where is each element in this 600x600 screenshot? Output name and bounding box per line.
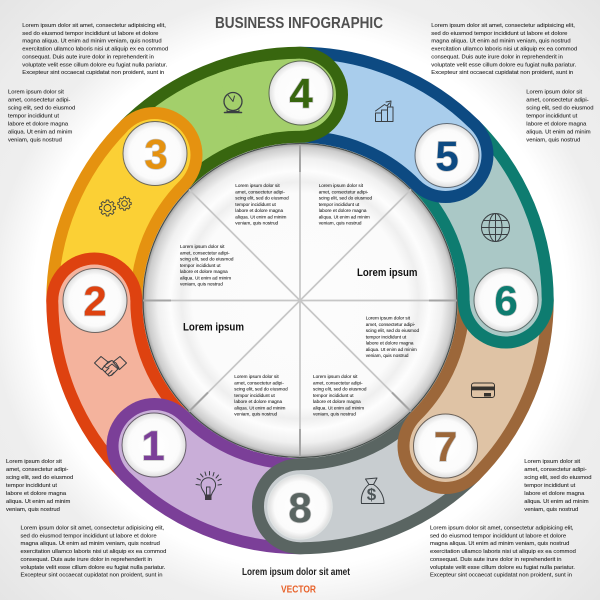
text block: upper left side [8,89,75,143]
text block: upper left side: aliqua. Ut enim ad minim [8,129,72,135]
text block: upper right side [526,89,594,143]
text block: upper right side: scing elit, sed do eiusmod [526,105,594,111]
disc text: bottom right: tempor incididunt ut [313,393,354,398]
icon: bar chart with arrow [376,101,393,122]
disc text: bottom left: amet, consectetur adipi- [234,380,284,385]
central disc [143,144,457,458]
badge 6 [474,268,538,332]
disc text: top left of top: amet, consectetur adipi- [235,189,285,194]
disc text: upper left: labore et dolore magna [180,269,228,274]
disc text: top left of top: scing elit, sed do eiusmod [235,196,289,200]
text block: bottom left: consequat. Duis aute irure dolor in reprehenderit in [20,557,152,563]
disc text: top left of top [235,183,289,226]
disc text: lower right: tempor incididunt ut [366,334,407,339]
text block: top right: Excepteur sint occaecat cupidatat non proident, sunt in [431,70,573,76]
text block: bottom left: magna aliqua. Ut enim ad minim veniam, quis nostrud [20,541,160,547]
disc text: lower right: veniam, quis nostrud [366,353,409,358]
disc heading right: Lorem ipsum [357,267,418,279]
disc text: lower right: amet, consectetur adipi- [366,322,416,327]
text block: lower right side: labore et dolore magna [524,491,585,497]
text block: upper left side: amet, consectetur adipi- [8,97,70,103]
text block: upper left side: scing elit, sed do eiusmod [8,105,75,111]
text block: bottom right: magna aliqua. Ut enim ad minim veniam, quis nostrud [430,541,569,547]
text block: bottom right: consequat. Duis aute irure dolor in reprehenderit in [430,557,562,563]
disc text: lower right: labore et dolore magna [366,340,414,346]
segment 4 body: green [154,95,300,155]
badge 5: 5 [435,132,459,180]
text block: lower right side: amet, consectetur adipi- [524,467,587,473]
disc text: upper left: tempor incididunt ut [180,263,221,268]
disc text: top right: tempor incididunt ut [319,202,360,207]
badge 3: 3 [144,130,168,178]
disc text: bottom left: tempor incididunt ut [234,393,276,398]
disc text: bottom right: veniam, quis nostrud [313,412,356,416]
text block: top right: voluptate velit esse cillum dolore eu fugiat nulla pariatur. [431,62,577,68]
text block: lower right side: Lorem ipsum dolor sit [524,459,581,465]
text block: top left: Excepteur sint occaecat cupidatat non proident, sunt in [22,70,164,76]
disc text: bottom right: Lorem ipsum dolor sit [313,374,358,379]
text block: lower left side: scing elit, sed do eiusmod [6,475,73,481]
disc text: top right: labore et dolore magna [319,208,367,213]
badge 4: 4 [289,70,313,117]
text block: upper left side: labore et dolore magna [8,121,69,127]
disc text: bottom left: aliqua. Ut enim ad minim [234,405,286,410]
disc text: upper left: veniam, quis nostrud [180,282,223,286]
text block: top left: Lorem ipsum dolor sit amet, consectetur adipisicing elit, [22,23,166,29]
disc text: top left of top: veniam, quis nostrud [235,220,279,226]
text block: bottom right: sed do eiusmod tempor incididunt ut labore et dolore [430,533,566,539]
text block: top left: consequat. Duis aute irure dolor in reprehenderit in [22,54,154,60]
text block: top left: voluptate velit esse cillum dolore eu fugiat nulla pariatur. [22,62,168,68]
disc text: top right: veniam, quis nostrud [319,220,362,226]
disc text: top right: scing elit, sed do eiusmod [319,196,373,200]
text block: lower left side: tempor incididunt ut [6,483,57,489]
segment 8 body: gray [252,446,446,554]
text block: upper right side: aliqua. Ut enim ad minim [526,129,591,135]
footer caption: Lorem ipsum dolor sit amet [242,566,350,578]
text block: lower left side: amet, consectetur adipi- [6,467,68,473]
badge 2: 2 [83,278,107,324]
text block: lower left side: Lorem ipsum dolor sit [6,459,62,465]
text block: lower right side: aliqua. Ut enim ad minim [524,499,589,505]
text block: bottom left: exercitation ullamco laboris nisi ut aliquip ex ea commod [20,549,166,555]
disc text: top right: aliqua. Ut enim ad minim [319,214,370,219]
disc text: bottom right: amet, consectetur adipi- [313,380,363,385]
segment 5 body: blue [300,95,494,203]
text block: top right [431,23,577,76]
text block: lower right side: veniam, quis nostrud [524,507,578,513]
text block: top right: exercitation ullamco laboris nisi ut aliquip ex ea commod [431,47,577,53]
text block: upper right side: Lorem ipsum dolor sit [526,89,583,95]
disc heading left: Lorem ipsum [183,322,244,334]
disc text: bottom right: aliqua. Ut enim ad minim [313,405,364,410]
disc text: lower right: Lorem ipsum dolor sit [366,316,411,320]
text block: upper left side: veniam, quis nostrud [8,137,62,143]
badge 7 [414,414,478,478]
disc text: bottom left [234,374,288,416]
disc text: bottom right [313,374,367,416]
text block: lower right side: tempor incididunt ut [524,483,576,489]
disc text: top right: Lorem ipsum dolor sit [319,183,364,188]
segment 3 body: yellow [94,107,202,300]
icon: money bag: $ [367,485,377,504]
segment 6 body: teal [446,155,554,348]
icon: gears [100,197,131,216]
text block: bottom right: voluptate velit esse cillum dolore eu fugiat nulla pariatur. [430,565,575,571]
text block: bottom left: sed do eiusmod tempor incididunt ut labore et dolore [20,533,157,539]
icon: handshake [94,356,126,376]
text block: bottom right: Lorem ipsum dolor sit amet, consectetur adipisicing elit, [430,526,574,532]
text block: top right: Lorem ipsum dolor sit amet, consectetur adipisicing elit, [431,23,575,29]
segment 2 body: red [46,252,154,446]
text block: bottom left: voluptate velit esse cillum dolore eu fugiat nulla pariatur. [20,565,166,571]
badge 5 [415,124,479,188]
disc text: bottom left: labore et dolore magna [234,399,282,404]
text block: top left [22,23,168,76]
text block: lower right side: scing elit, sed do eiusmod [524,475,592,481]
badge 3 [123,122,187,186]
icon: clock [224,92,242,112]
icon: light bulb [196,472,222,500]
text block: lower left side: labore et dolore magna [6,491,67,497]
text block: bottom left: Lorem ipsum dolor sit amet, consectetur adipisicing elit, [20,526,164,532]
disc text: upper left: amet, consectetur adipi- [180,250,230,255]
disc text: lower right [366,316,420,358]
text block: top right: magna aliqua. Ut enim ad minim veniam, quis nostrud [431,39,571,45]
segment 1 body: purple [106,398,300,506]
disc text: lower right: scing elit, sed do eiusmod [366,328,420,333]
title: BUSINESS INFOGRAPHIC [215,15,383,32]
segment 7 body: brown [398,300,506,494]
disc text: bottom right: labore et dolore magna [313,399,361,404]
text block: upper right side: veniam, quis nostrud [526,137,580,143]
text block: upper right side: amet, consectetur adipi- [526,97,589,103]
text block: top left: magna aliqua. Ut enim ad minim veniam, quis nostrud [22,39,162,45]
disc text: bottom left: Lorem ipsum dolor sit [234,374,279,379]
badge 8: 8 [288,484,312,531]
disc text: top left of top: labore et dolore magna [235,208,283,213]
badge 6: 6 [494,277,518,324]
text block: lower left side: veniam, quis nostrud [6,507,60,513]
text block: top right: sed do eiusmod tempor incididunt ut labore et dolore [431,31,567,37]
text block: top left: exercitation ullamco laboris nisi ut aliquip ex ea commod [22,47,168,53]
disc text: top left of top: Lorem ipsum dolor sit [235,183,280,188]
segment 4 head [230,47,348,143]
text block: upper right side: tempor incididunt ut [526,113,578,119]
text block: bottom left [20,526,166,579]
icon: credit card [472,383,494,398]
badge 1 [122,413,186,477]
text block: bottom right: exercitation ullamco laboris nisi ut aliquip ex ea commod [430,549,576,555]
text block: upper right side: labore et dolore magna [526,121,587,127]
disc text: top left of top: tempor incididunt ut [235,202,277,207]
disc text: top right [319,183,373,226]
disc text: upper left [180,244,234,286]
badge 1: 1 [141,422,165,469]
disc text: lower right: aliqua. Ut enim ad minim [366,347,417,352]
disc text: top left of top: aliqua. Ut enim ad minim [235,214,287,219]
text block: top left: sed do eiusmod tempor incididunt ut labore et dolore [22,31,158,37]
text block: upper left side: tempor incididunt ut [8,113,59,119]
disc text: upper left: aliqua. Ut enim ad minim [180,275,231,280]
disc text: bottom right: scing elit, sed do eiusmod [313,386,367,392]
icon: money bag [361,478,384,504]
text block: lower left side: aliqua. Ut enim ad minim [6,499,70,505]
badge 2 [63,268,127,332]
badge 8 [268,475,332,539]
text block: upper left side: Lorem ipsum dolor sit [8,89,64,95]
disc text: upper left: scing elit, sed do eiusmod [180,256,234,262]
text block: bottom right [430,526,576,579]
disc text: bottom left: veniam, quis nostrud [234,412,278,416]
text block: lower left side [6,459,73,513]
badge 7: 7 [434,423,457,470]
disc text: upper left: Lorem ipsum dolor sit [180,244,225,249]
text block: lower right side [524,459,592,513]
disc text: bottom left: scing elit, sed do eiusmod [234,386,288,392]
disc text: top right: amet, consectetur adipi- [319,189,369,194]
badge 4 [269,61,333,125]
text block: bottom right: Excepteur sint occaecat cupidatat non proident, sunt in [430,573,572,579]
text block: top right: consequat. Duis aute irure dolor in reprehenderit in [431,54,563,60]
text block: bottom left: Excepteur sint occaecat cupidatat non proident, sunt in [20,573,162,579]
icon: globe [482,214,510,242]
footer vector label: VECTOR [281,584,317,596]
